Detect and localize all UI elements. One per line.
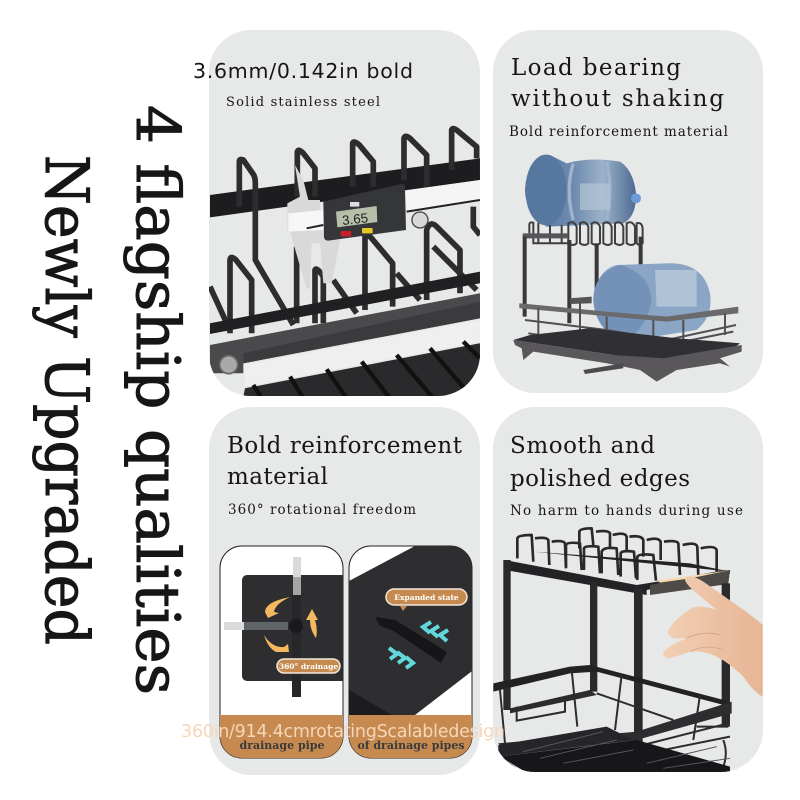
rack with hand illustration: [493, 528, 763, 777]
rack with caliper illustration: 3.65: [341, 210, 369, 228]
panel: 360 rotational freedom: [209, 407, 480, 775]
label: 360 drainage: [277, 659, 340, 673]
heading: smooth and polished edges: Smooth and: [510, 433, 655, 459]
label: 360 drainage: 360° drainage: [279, 662, 338, 671]
card: 360 drainage: [220, 546, 352, 758]
vertical heading: Newly Upgraded: Newly Upgraded: [31, 155, 101, 645]
heading: bold reinforcement material: Bold reinforcement: [227, 433, 463, 459]
subheading: solid stainless steel: Solid stainless steel: [226, 95, 380, 110]
overlay caption text: 360in/914.4cmrotatingScalabledesign: [181, 722, 505, 742]
label: expanded state: Expanded state: [394, 593, 459, 602]
rack with water bottles illustration: [513, 155, 742, 382]
heading: bold reinforcement material: material: [227, 464, 328, 490]
card: 360 drainage: drainage pipe: [240, 739, 324, 752]
icon: rotation arrows: [264, 597, 318, 652]
heading: load bearing without shaking: Load bearing: [511, 55, 681, 81]
icon: cyan arrows: [389, 622, 448, 668]
label: expanded state: [386, 589, 467, 611]
caliper: [287, 165, 340, 290]
card: expanded state: [349, 546, 480, 758]
panel: solid stainless steel: [193, 30, 480, 398]
vertical heading: 4 flagship qualities: 4 flagship qualities: [122, 105, 192, 695]
rack with caliper illustration: [210, 129, 480, 398]
subheading: bold reinforcement material: Bold reinforcement material: [509, 124, 728, 140]
subheading: 360 rotational freedom: 360° rotational freedom: [228, 502, 416, 518]
heading: smooth and polished edges: [510, 433, 690, 492]
subheading: no harm to hands: No harm to hands during use: [510, 503, 743, 519]
heading: bold reinforcement material: [227, 433, 463, 490]
panel: load bearing: [493, 30, 763, 393]
panel: smooth edges: [493, 407, 763, 777]
heading: load bearing without shaking: without shaking: [511, 86, 724, 112]
heading: load bearing without shaking: [511, 55, 724, 112]
heading: 3.6mm bold: 3.6mm/0.142in bold: [193, 59, 413, 83]
hand: [663, 576, 763, 697]
card: expanded state: of drainage pipes: [357, 739, 465, 752]
heading: smooth and polished edges: polished edges: [510, 466, 690, 492]
